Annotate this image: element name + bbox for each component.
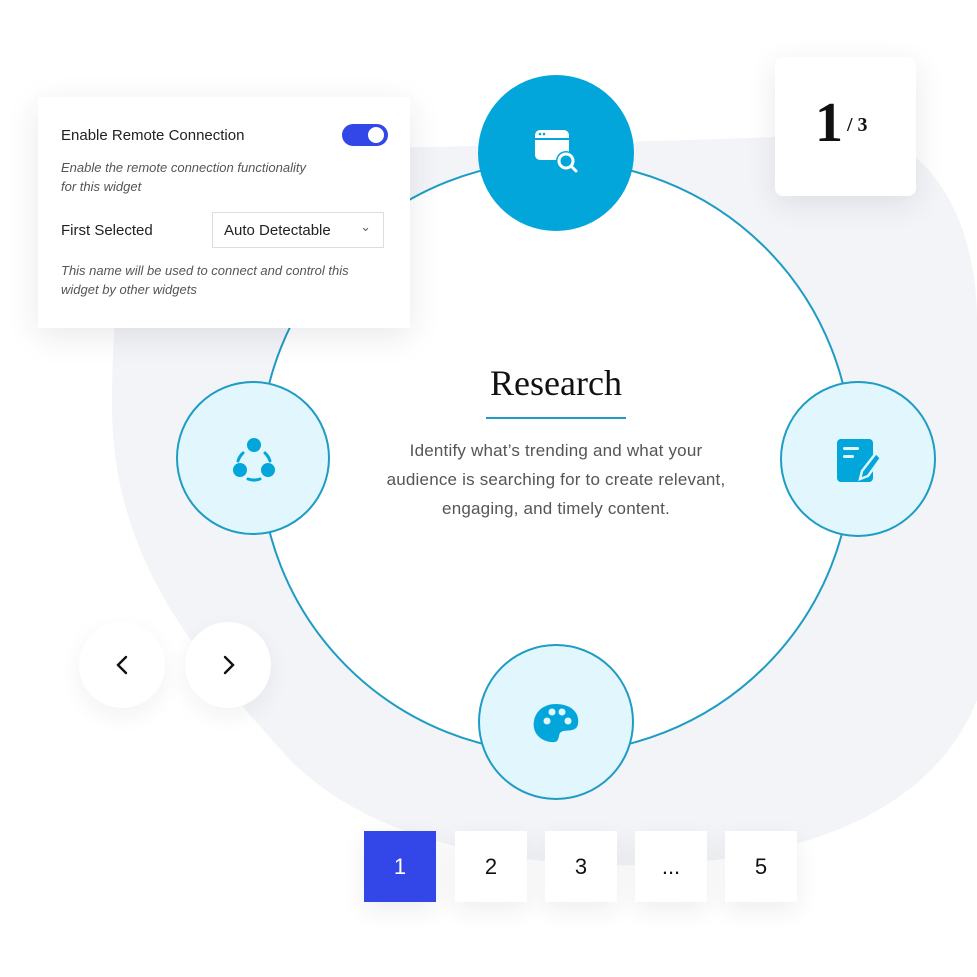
- pagination: 5: [755, 854, 767, 878]
- pagination: 1: [394, 854, 406, 878]
- first selected label: First Selected: [61, 222, 153, 239]
- counter card 1/3: 1/ 3: [815, 92, 868, 154]
- pagination: ...: [662, 854, 680, 878]
- toggle row: Enable Remote Connection: [61, 127, 244, 144]
- pagination: 3: [575, 854, 587, 878]
- node: bottom palette icon: [478, 644, 634, 800]
- toggle switch: [342, 124, 388, 146]
- help text 1: for this widget: [61, 179, 141, 194]
- pagination: 2: [485, 854, 497, 878]
- heading: Research: Research: [490, 363, 622, 403]
- help text 1: Enable the remote connection functionality: [61, 160, 306, 175]
- help text 2: This name will be used to connect and control this: [61, 263, 349, 278]
- help text 2: [61, 263, 349, 297]
- settings panel: [38, 97, 410, 328]
- description text: Identify what’s trending and what your: [410, 441, 702, 460]
- description text: [387, 441, 725, 518]
- node: right note icon: [780, 381, 936, 537]
- node: left share icon: [176, 381, 330, 535]
- node: top research icon: [478, 75, 634, 231]
- counter card 1/3: [775, 57, 916, 196]
- help text 1: [61, 160, 307, 194]
- dropdown: [212, 212, 384, 248]
- description text: audience is searching for to create relevant,: [387, 470, 725, 489]
- dropdown: Auto Detectable: [224, 222, 331, 239]
- pagination: [362, 831, 798, 912]
- underline: [486, 417, 626, 419]
- dropdown: ⌄: [360, 219, 371, 234]
- arrow: next: [185, 622, 271, 708]
- help text 2: widget by other widgets: [61, 282, 197, 297]
- arrow: previous: [79, 622, 165, 708]
- description text: engaging, and timely content.: [442, 499, 670, 518]
